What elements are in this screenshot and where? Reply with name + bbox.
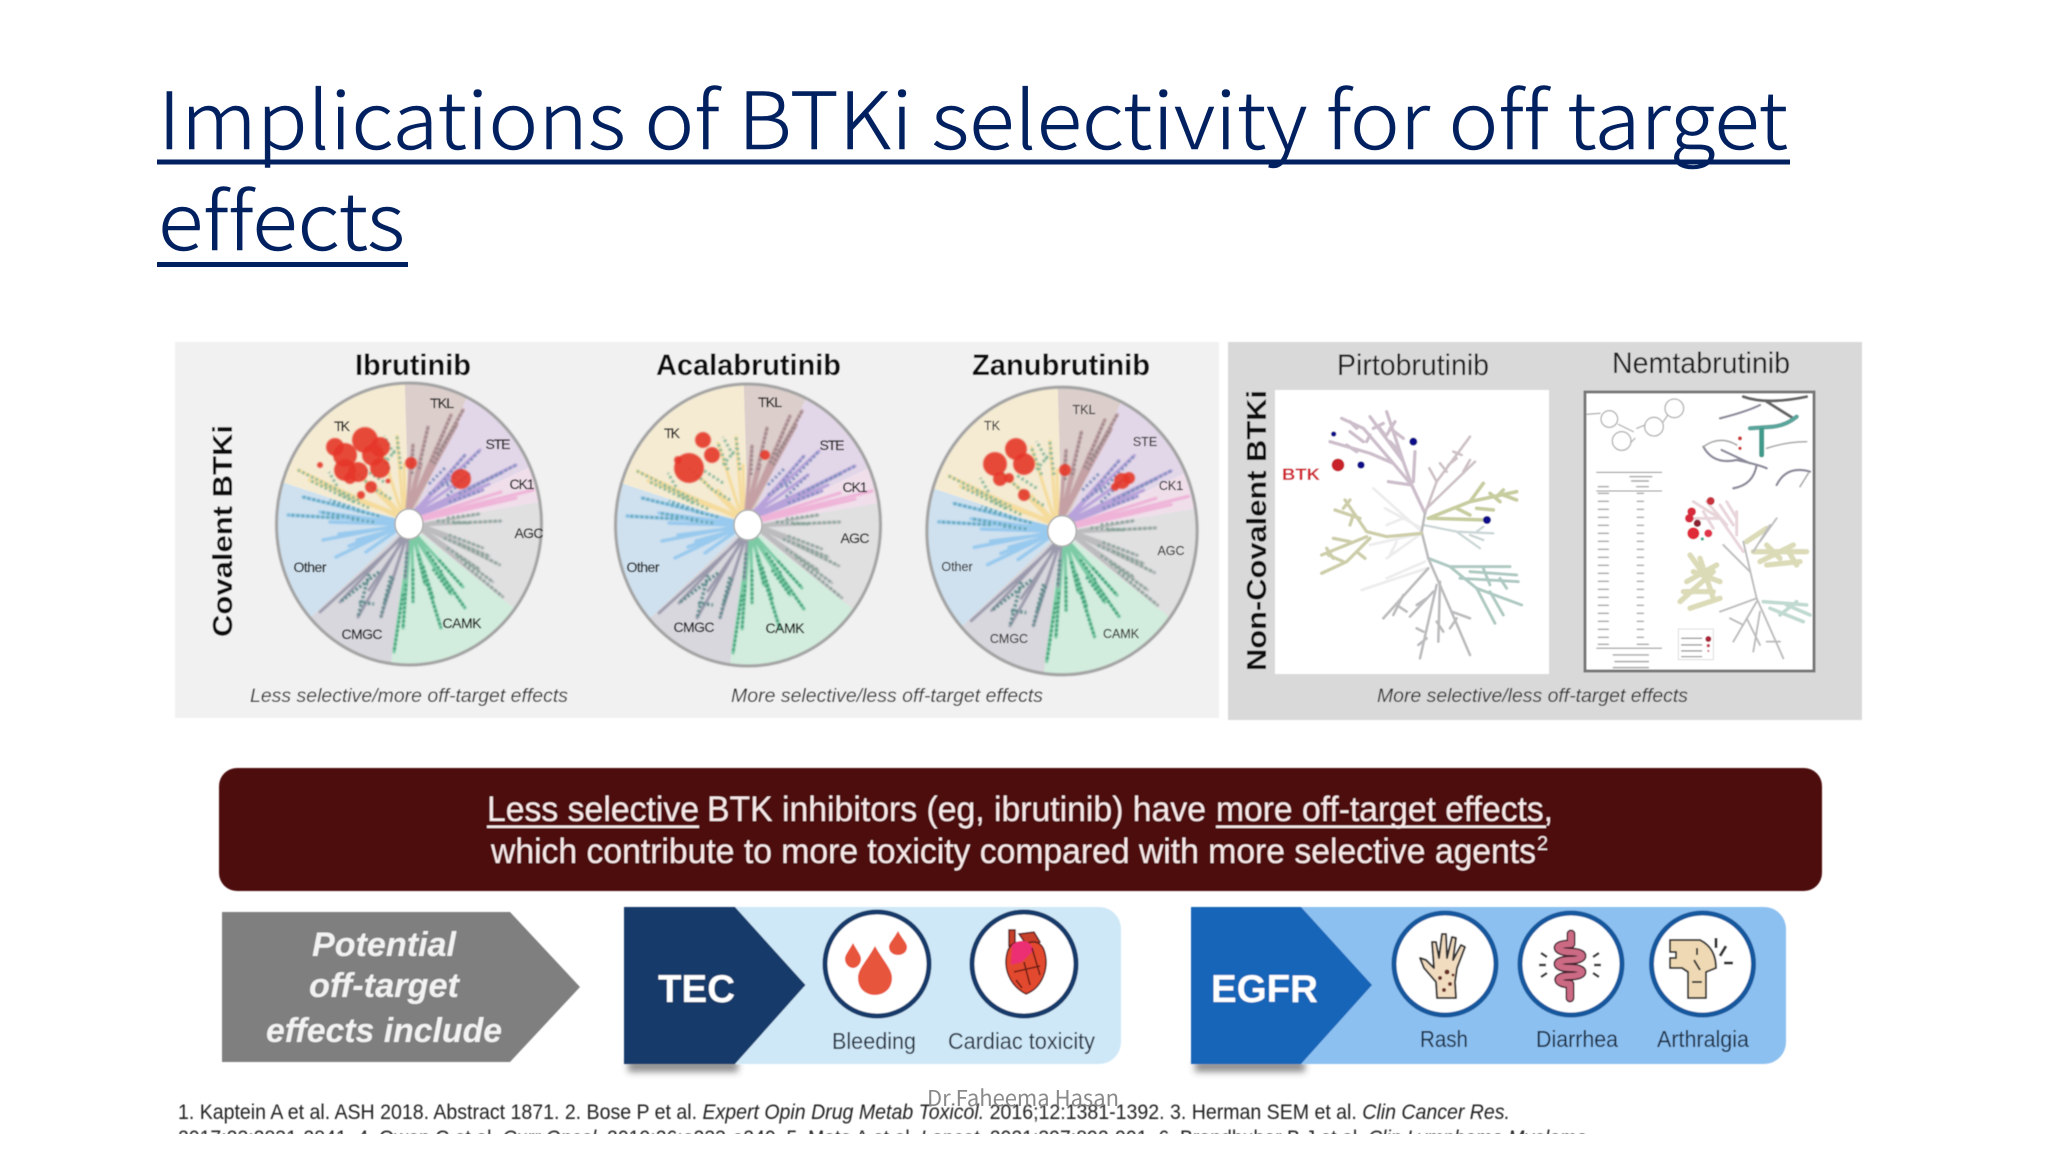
wheel: Acalabrutinib kinome: CAMK [766, 620, 805, 636]
wheel: Acalabrutinib kinome: AGC [840, 530, 870, 546]
wheel: Zanubrutinib kinome: AGC [1157, 544, 1185, 558]
wheel: Zanubrutinib kinome: CAMK [1103, 627, 1140, 641]
panel: TEC [624, 907, 1121, 1072]
wheel: Ibrutinib kinome: CMGC [342, 626, 382, 642]
arrow: potential off-target effects include: off-target [309, 967, 461, 1005]
legend [1678, 629, 1713, 660]
references: 1. Kaptein A et al. ASH 2018. Abstract 1871. 2. Bose P et al. Expert Opin Drug Metab Toxicol. 2016;12:1381-1392. 3. Herman SEM et al. Clin Cancer Res. [178, 1100, 1510, 1124]
label: BTK: BTK [1282, 465, 1321, 484]
wheel: Ibrutinib kinome: CK1 [510, 476, 535, 492]
wheel: Acalabrutinib kinome: TK [664, 425, 681, 441]
icon: cardiac toxicity [972, 912, 1076, 1016]
banner: key message [219, 768, 1822, 891]
wheel: Zanubrutinib kinome: CMGC [990, 632, 1028, 646]
icon: diarrhea [1520, 913, 1622, 1015]
arrow: TEC: TEC [658, 968, 735, 1011]
wheel: Acalabrutinib kinome: TKL [758, 394, 782, 410]
banner: key message: more off-target effects, [1216, 790, 1553, 829]
references: 2017;23:2831-2841. 4. Owen C et al. Curr Oncol. 2019;26:e233-e240. 5. Mato A et al. Lancet. 2021;397:892-901. 6. Brandhuber B J et al. Clin Lymphoma Myeloma [178, 1126, 1587, 1150]
panel: non-covalent BTKi [1228, 342, 1862, 720]
banner: key message: which contribute to more toxicity compared with more selective agents [490, 832, 1536, 871]
label: arthralgia: Arthralgia [1657, 1026, 1749, 1052]
label: rash: Rash [1420, 1026, 1468, 1052]
molecule structure [1587, 399, 1684, 450]
icon: arthralgia [1652, 913, 1754, 1015]
wheel: Acalabrutinib kinome [615, 384, 881, 666]
icon: rash [1394, 913, 1496, 1015]
wheel: Acalabrutinib kinome: Other [626, 559, 660, 575]
wheel: Ibrutinib kinome: TK [334, 418, 351, 434]
heading: Nemtabrutinib: Nemtabrutinib [1612, 347, 1790, 380]
wheel: Zanubrutinib kinome [926, 387, 1197, 675]
banner: key message: 2 [1537, 833, 1548, 855]
heading: Pirtobrutinib: Pirtobrutinib [1337, 349, 1489, 382]
title: effects [158, 158, 405, 273]
banner: key message: Less selective [487, 790, 699, 829]
caption: more selective: More selective/less off-target effects [731, 685, 1043, 707]
icon: bleeding [825, 912, 929, 1016]
label: bleeding: Bleeding [832, 1028, 916, 1054]
heading: Ibrutinib: Ibrutinib [355, 349, 471, 382]
label: Covalent BTKi: Covalent BTKi [207, 425, 238, 637]
arrow: EGFR [1191, 907, 1372, 1064]
arrow: potential off-target effects include: effects include [266, 1012, 502, 1050]
wheel: Zanubrutinib kinome: STE [1133, 435, 1157, 449]
heading: Acalabrutinib: Acalabrutinib [656, 349, 841, 382]
wheel: Ibrutinib kinome: TKL [430, 395, 454, 411]
selectivity table [1597, 472, 1662, 648]
label: diarrhea: Diarrhea [1536, 1026, 1618, 1052]
arrow: EGFR: EGFR [1211, 968, 1318, 1011]
caption: less selective: Less selective/more off-target effects [250, 685, 568, 707]
label: Non-Covalent BTKi: Non-Covalent BTKi [1241, 390, 1272, 671]
wheel: Zanubrutinib kinome: TK [984, 419, 1001, 433]
mini kinome tree [1693, 502, 1743, 552]
wheel: Ibrutinib kinome: AGC [514, 525, 544, 541]
arrow: TEC [624, 907, 806, 1064]
panel: EGFR [1191, 907, 1786, 1072]
label: cardiac toxicity: Cardiac toxicity [948, 1028, 1095, 1054]
footer: author: Dr Faheema Hasan [927, 1081, 1119, 1113]
arrow: potential off-target effects include [222, 912, 580, 1062]
caption: more selective non-covalent: More selective/less off-target effects [1377, 685, 1688, 707]
wheel: Acalabrutinib kinome: CK1 [842, 479, 868, 495]
arrow: potential off-target effects include: Potential [312, 926, 458, 964]
wheel: Zanubrutinib kinome: Other [941, 560, 973, 574]
wheel: Acalabrutinib kinome: CMGC [674, 619, 714, 635]
wheel: Acalabrutinib kinome: STE [820, 437, 844, 453]
panel: covalent BTKi [175, 342, 1219, 718]
wheel: Ibrutinib kinome: Other [294, 559, 327, 575]
protein structure [1703, 397, 1810, 488]
wheel: Ibrutinib kinome: CAMK [442, 615, 482, 631]
references [178, 1102, 1586, 1134]
chart: Nemtabrutinib data figure [1585, 392, 1814, 671]
banner: key message: BTK inhibitors (eg, ibrutinib) have [707, 790, 1206, 829]
title: Implications of BTKi selectivity for off target [158, 57, 1788, 172]
wheel: Zanubrutinib kinome: CK1 [1159, 479, 1183, 493]
chart: Pirtobrutinib kinome tree [1275, 390, 1549, 674]
heading: Zanubrutinib: Zanubrutinib [972, 349, 1150, 382]
wheel: Ibrutinib kinome: STE [486, 436, 510, 452]
wheel: Ibrutinib kinome [276, 383, 544, 665]
wheel: Zanubrutinib kinome: TKL [1073, 403, 1096, 417]
title [157, 57, 1790, 273]
